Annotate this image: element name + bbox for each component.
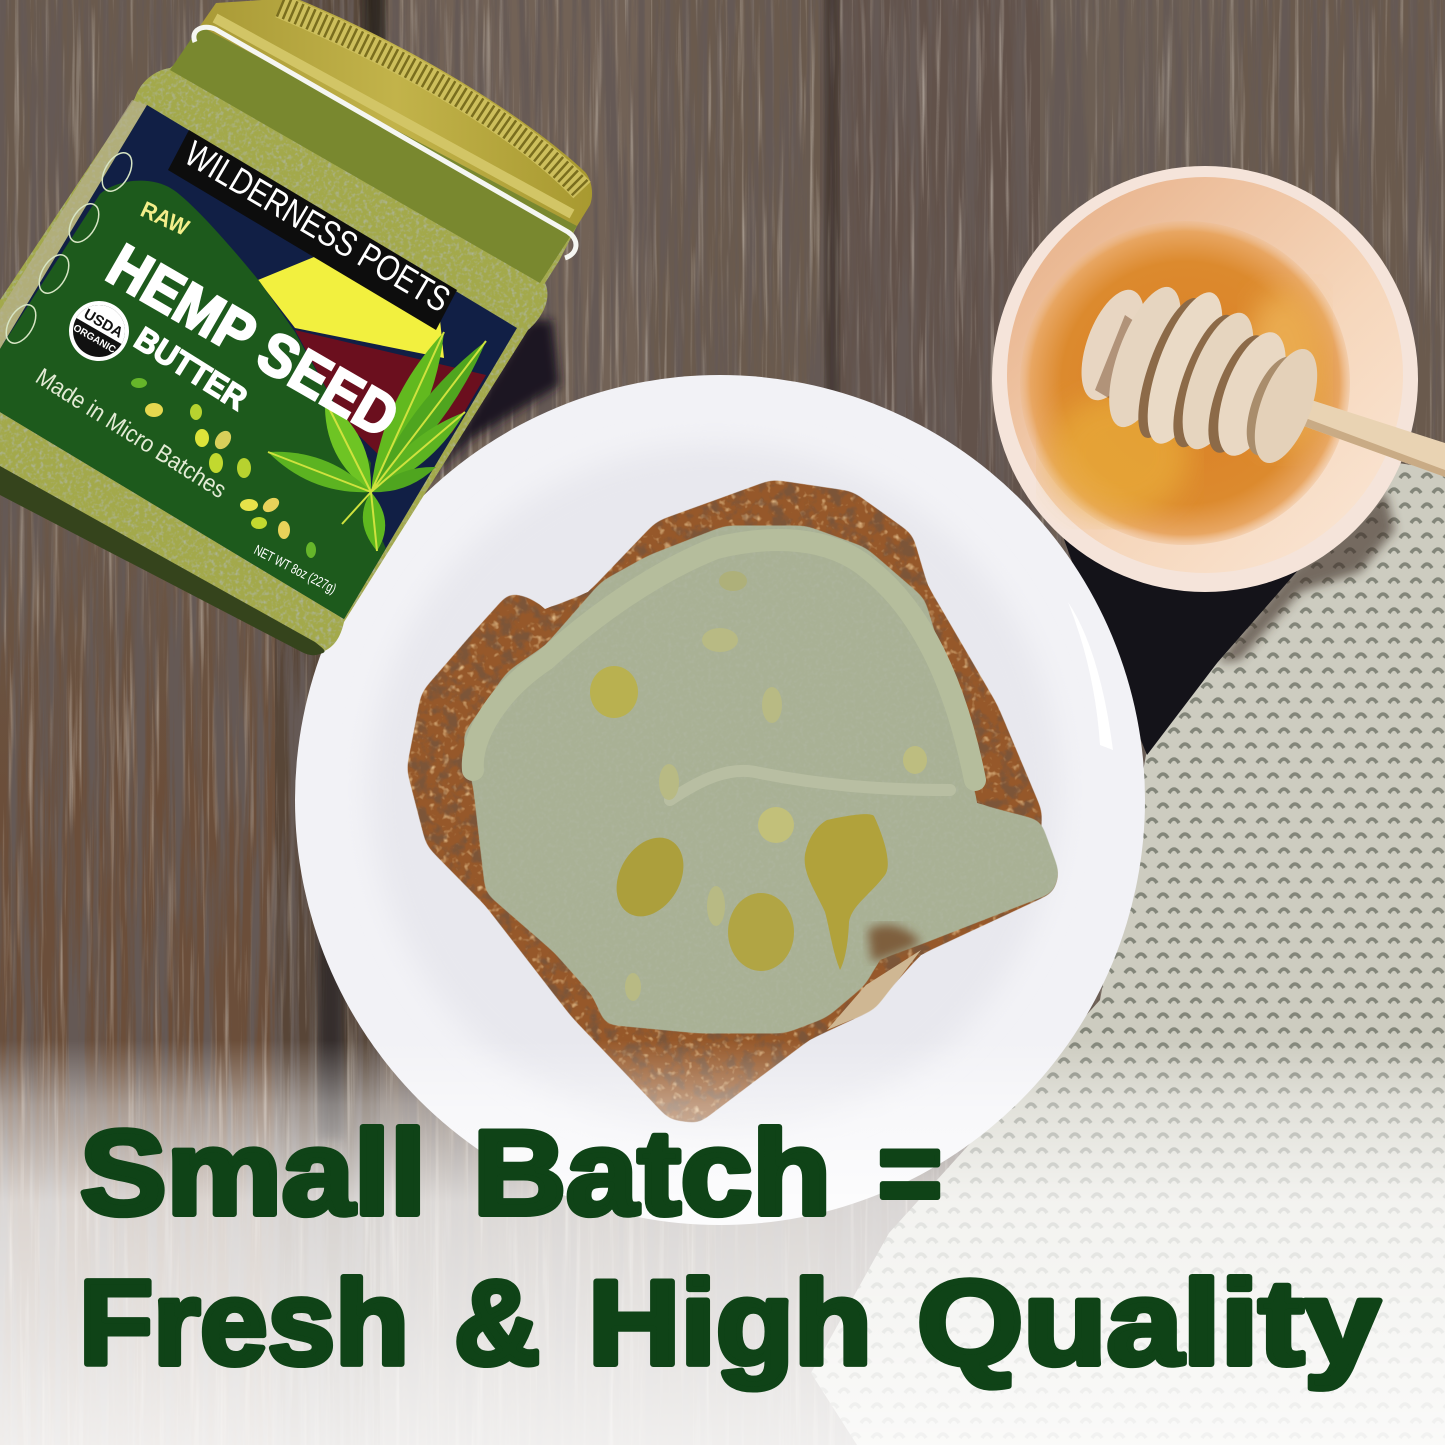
towel (811, 463, 1445, 1445)
headline line 2: High (588, 1256, 872, 1390)
toast (406, 479, 1060, 1124)
honey pool (1020, 221, 1350, 545)
white neck ring (194, 27, 576, 258)
USDA organic seal (58, 290, 140, 372)
headline line 1: Batch (473, 1106, 831, 1240)
honey dipper (1069, 278, 1445, 477)
USDA organic seal: ORGANIC (71, 323, 117, 356)
net weight: NET WT 8oz (227g) (252, 541, 339, 597)
headline line 2 (79, 1256, 1380, 1390)
jar glass body (0, 26, 577, 655)
bare toast patch (868, 925, 921, 962)
side badges (0, 148, 138, 348)
brand banner: WILDERNESS POETS (178, 133, 457, 320)
raw label: RAW (137, 196, 193, 241)
plate (295, 375, 1145, 1225)
jar of hemp seed butter (0, 0, 592, 655)
headline line 2: & (454, 1256, 540, 1390)
headline line 2: Quality (917, 1256, 1380, 1390)
headline line 1 (80, 1106, 942, 1240)
tagline: Made in Micro Batches (31, 363, 231, 504)
label (0, 105, 517, 640)
hemp leaf (268, 332, 486, 551)
white fade at the bottom (0, 1040, 1445, 1445)
headline line 1: = (878, 1106, 942, 1240)
dark shadow between plate and bowl (1050, 500, 1300, 755)
lid (200, 0, 592, 226)
dark shadow beside the jar (380, 320, 560, 560)
USDA organic seal: USDA (81, 306, 126, 342)
headline line 1: Small (80, 1106, 426, 1240)
product name: HEMP SEED (96, 231, 410, 451)
product name: BUTTER (128, 320, 254, 417)
headline line 2: Fresh (79, 1256, 409, 1390)
hemp butter spread (462, 525, 1060, 1034)
seeds (131, 378, 316, 558)
honey bowl (992, 166, 1445, 592)
headline (79, 1106, 1380, 1390)
honey drizzle drops (590, 571, 927, 1001)
